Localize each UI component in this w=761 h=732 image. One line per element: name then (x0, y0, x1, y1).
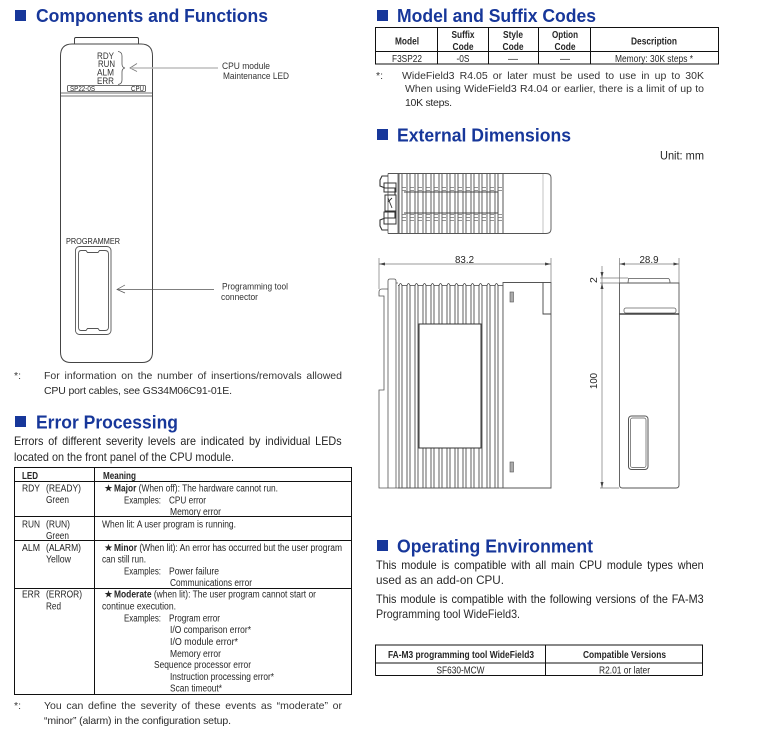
unit label: Unit: mm (660, 148, 704, 162)
table: compatible versions (376, 645, 702, 676)
table row: F3SP22 (392, 54, 422, 65)
row: ERR: Moderate (when lit): The user program cannot start or (114, 590, 317, 600)
row: ALM (22, 543, 342, 589)
row: RDY: Memory error (170, 507, 222, 518)
row: ALM: Examples: (124, 566, 161, 578)
row: RUN: (RUN) (46, 520, 70, 530)
footnote: WideField3 versions: 10K steps. (405, 97, 452, 109)
row: ERR: Instruction processing error* (170, 672, 274, 683)
diagram: top view (380, 174, 551, 234)
row: RUN: RUN (22, 520, 40, 530)
row: ALM: Communications error (170, 578, 253, 589)
module name plate (68, 86, 146, 93)
LED labels: RDY (97, 51, 115, 62)
table header: Suffix (452, 30, 475, 41)
row: RUN: When lit: A user program is running. (102, 520, 236, 530)
footnote: severity: *: (14, 700, 21, 712)
table header: FA-M3 programming tool WideField3 (388, 650, 534, 661)
text: error processing intro: located on the front panel of the CPU module. (14, 450, 234, 464)
dimension: 28.9 width: 28.9 (640, 254, 659, 266)
row: RUN (22, 520, 236, 542)
row: RDY: ★ (104, 484, 113, 494)
row: ALM: (ALARM) (46, 543, 81, 554)
footnote: WideField3 versions: *: (376, 70, 383, 82)
dimension: 2 and 100 height: 2 (588, 277, 600, 283)
row: ERR: (ERROR) (46, 590, 82, 600)
heading: Components and Functions: Components and Functions (36, 6, 268, 26)
table row: R2.01 or later (599, 666, 651, 676)
table header: Model (395, 36, 419, 48)
row: ERR: Examples: (124, 614, 161, 624)
text: operating environment: used as an add-on CPU. (376, 573, 504, 587)
table row: Memory: 30K steps * (615, 54, 693, 65)
footnote: port cables (14, 370, 342, 397)
diagram: side view (379, 279, 551, 488)
row: RDY: RDY (22, 484, 40, 494)
row: ERR: I/O comparison error* (170, 625, 251, 636)
footnote: WideField3 versions (376, 70, 704, 109)
row: ERR (22, 590, 317, 694)
table header: Description (631, 36, 677, 48)
table header: Code (452, 42, 474, 53)
dimension: 2 and 100 height: 100 (588, 373, 600, 389)
footnote: port cables: CPU port cables, see GS34M06C91-01E. (44, 385, 232, 397)
callout: programming tool connector: connector (221, 292, 258, 303)
table header: LED (22, 471, 38, 482)
row: ALM: ALM (22, 543, 40, 554)
row: ERR: Sequence processor error (154, 660, 252, 671)
footnote: severity: You can define the severity of these events as “moderate” or (44, 700, 342, 712)
dimension: 83.2 width (379, 254, 551, 289)
row: RDY: (READY) (46, 484, 81, 494)
table header: Meaning (103, 471, 136, 482)
table row: — (560, 54, 570, 65)
heading: External Dimensions: External Dimensions (397, 126, 571, 146)
table header: Code (554, 42, 576, 53)
row: ERR: I/O module error* (170, 637, 238, 648)
table: model and suffix codes (376, 28, 718, 65)
table: LED meanings (14, 468, 352, 694)
dimension: 83.2 width: 83.2 (455, 254, 474, 266)
front view connector (628, 416, 648, 470)
row: ALM: ★ (104, 543, 113, 554)
footnote: WideField3 versions: When using WideField3 R4.04 or earlier, there is a limit of up to (405, 83, 704, 95)
table header: Code (502, 42, 524, 53)
table row (392, 54, 693, 65)
heading: Error Processing: Error Processing (36, 412, 178, 432)
diagram: front view (620, 278, 679, 488)
module name plate: SP22-0S (70, 86, 95, 93)
callout: CPU module maintenance LED: Maintenance LED (223, 71, 289, 82)
row: RUN: Green (46, 531, 69, 542)
footnote: severity (14, 700, 342, 727)
row: ERR: ERR (22, 590, 40, 600)
row: ALM: Power failure (169, 566, 219, 578)
row: ERR: ★ (104, 590, 113, 600)
LED brace (118, 52, 125, 84)
LED labels: ERR (97, 76, 114, 87)
dimension: 28.9 width (620, 254, 679, 283)
module name plate: CPU (131, 86, 144, 93)
programmer port label: PROGRAMMER (66, 237, 120, 246)
programmer port (76, 246, 111, 334)
callout: CPU module maintenance LED: CPU module (222, 61, 270, 72)
table row (436, 666, 651, 676)
table header (22, 471, 136, 482)
row: ERR: Scan timeout* (170, 684, 222, 694)
row: ALM: Yellow (46, 554, 72, 566)
table row: -0S (456, 54, 470, 65)
table header: Option (552, 30, 578, 41)
heading: Operating Environment: Operating Environment (397, 536, 593, 556)
row: RDY: Green (46, 495, 69, 506)
text: operating environment: This module is compatible with the following versions of the FA-M3 (376, 592, 704, 606)
row: ERR: Red (46, 602, 61, 612)
table header: Compatible Versions (583, 650, 666, 661)
row: RDY: CPU error (169, 496, 207, 506)
table row: SF630-MCW (436, 666, 485, 676)
heading: Model and Suffix Codes: Model and Suffix Codes (397, 6, 596, 26)
table header: Style (503, 30, 523, 41)
text: operating environment: Programming tool WideField3. (376, 607, 520, 621)
row: RDY: Examples: (124, 496, 161, 506)
text: error processing intro (14, 434, 342, 464)
diagram: CPU module front view (60, 38, 152, 362)
row: RDY (22, 484, 278, 518)
row: ERR: continue execution. (102, 602, 176, 612)
row: RDY: Major (When off): The hardware cannot run. (114, 484, 278, 494)
dimension: 2 and 100 height (588, 266, 628, 488)
row: ERR: Memory error (170, 649, 222, 660)
LED labels: ALM (97, 68, 114, 78)
row: ALM: Minor (When lit): An error has occurred but the user program (114, 543, 342, 554)
footnote: port cables: *: (14, 370, 21, 382)
text: error processing intro: Errors of different severity levels are indicated by individual LEDs (14, 434, 342, 448)
row: ALM: can still run. (102, 554, 146, 566)
table row: — (508, 54, 518, 65)
callout: programming tool connector (117, 282, 288, 303)
text: operating environment: This module is compatible with all main CPU module types when (376, 558, 704, 572)
footnote: severity: “minor” (alarm) in the configuration setup. (44, 715, 231, 727)
text: operating environment (376, 558, 704, 621)
row: ERR: Program error (169, 614, 221, 624)
LED labels: RUN (98, 59, 115, 70)
table header (388, 650, 666, 661)
callout: programming tool connector: Programming tool (222, 282, 288, 292)
callout: CPU module maintenance LED (130, 61, 289, 82)
table header (395, 30, 677, 53)
LED labels (97, 51, 115, 87)
